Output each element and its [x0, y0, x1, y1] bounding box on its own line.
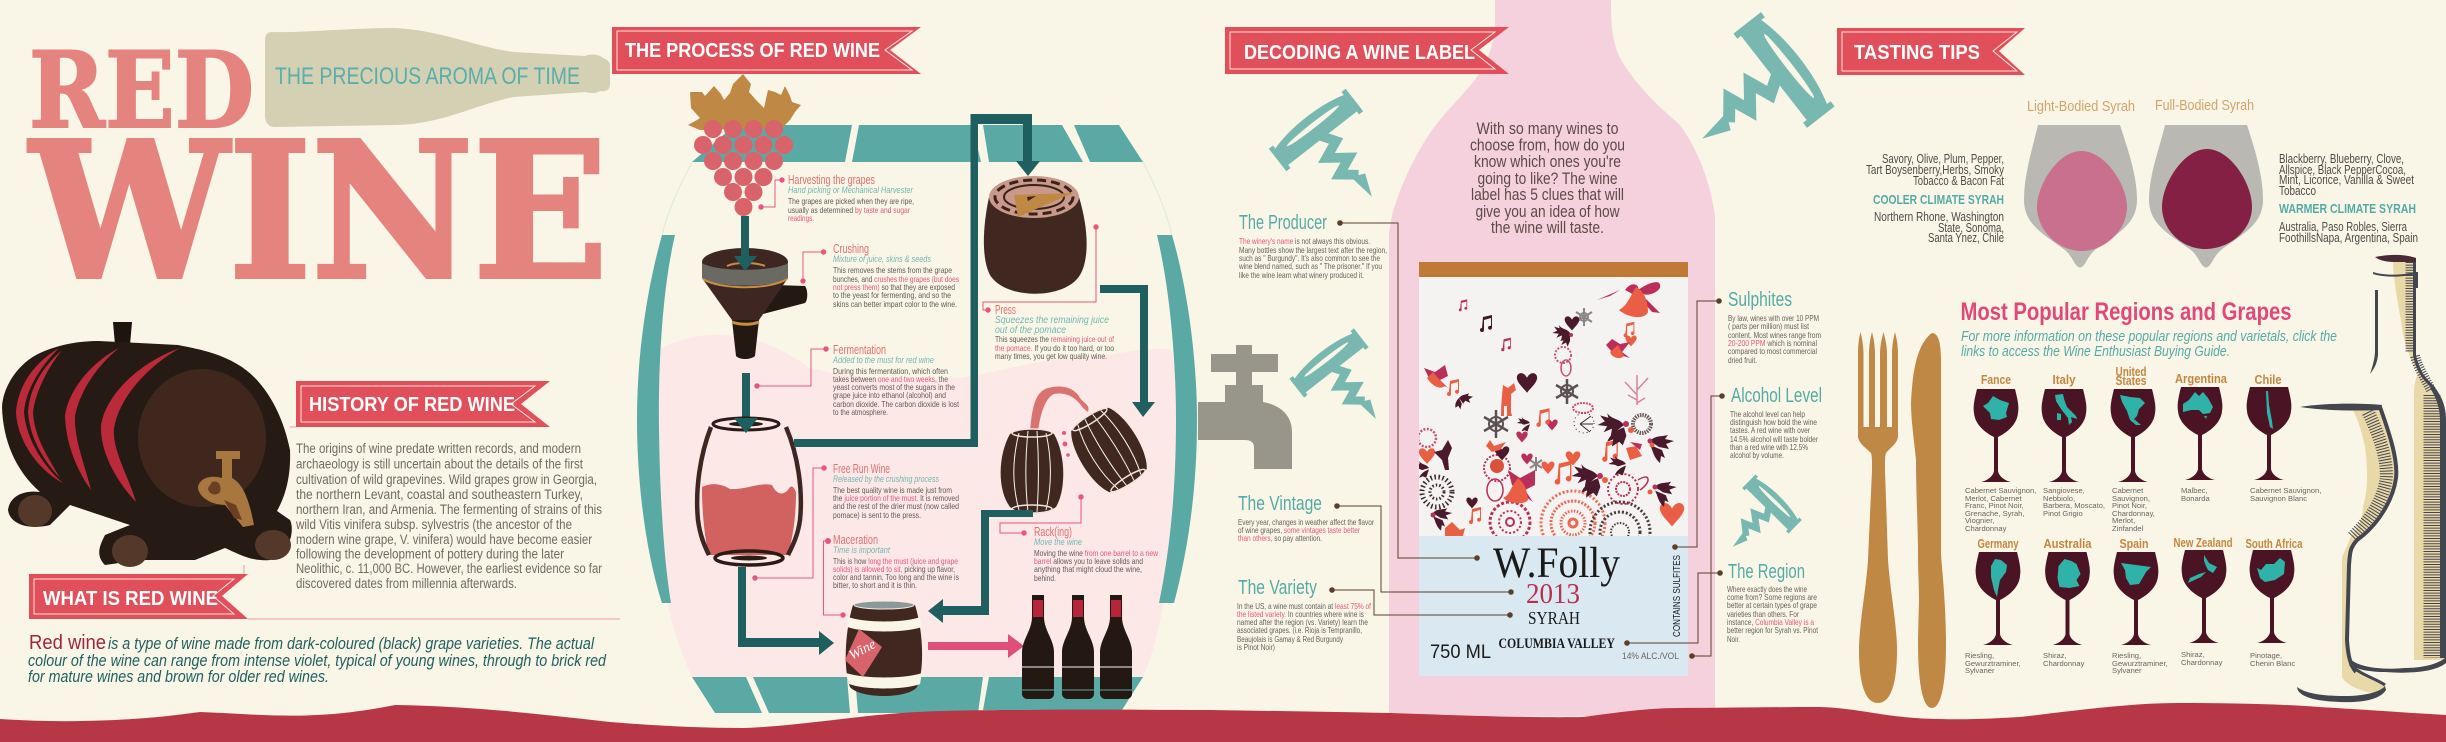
- callout: crushing: skins can better impart color to the wine.: [833, 299, 957, 309]
- callout: harvesting the grapes: Harvesting the grapes: [788, 172, 875, 187]
- callout: the region: varieties than others. For: [1727, 609, 1799, 619]
- country: Chile: Cabernet Sauvignon,: [2250, 486, 2321, 495]
- banner: what is red wine: WHAT IS RED WINE: [43, 588, 218, 610]
- callout: crushing: This removes the stems from the grape: [833, 265, 952, 275]
- callout: alcohol level: [1689, 385, 1822, 659]
- country: France: Fance: [1981, 372, 2011, 387]
- chart: light-bodied syrah glass: Light-Bodied Syrah: [2027, 98, 2135, 115]
- callout: free run wine: The best quality wine is made just from: [833, 485, 952, 495]
- country: South Africa: [2246, 536, 2303, 668]
- callout: maceration: solids) is allowed to sit, picking up flavor,: [833, 564, 955, 574]
- text block: warmer climate syrah: [2279, 152, 2418, 245]
- illustration: oak barrel with tap: [2, 322, 292, 567]
- chart: wine regions row two: [1965, 535, 2303, 675]
- icon: racking barrels pouring: [1001, 386, 1156, 513]
- callout: harvesting the grapes: [758, 172, 914, 223]
- arrow: press to racking: [1100, 285, 1155, 417]
- callout: harvesting the grapes: Hand picking or Mechanical Harvester: [788, 185, 914, 195]
- text block: history of red wine: archaeology is still uncertain about the details of the first: [296, 456, 583, 472]
- bottle with subtitle: THE PRECIOUS AROMA OF TIME: [275, 63, 580, 90]
- text block: cooler climate syrah: Santa Ynez, Chile: [1928, 231, 2004, 245]
- music notes: [1447, 322, 1634, 524]
- callout: the producer: like the wine learn what winery produced it.: [1239, 270, 1364, 280]
- text block: what is red wine: Red wine: [29, 632, 106, 654]
- callout: the region: instance, Columbia Valley is a: [1727, 617, 1814, 627]
- text block: cooler climate syrah: Tart Boysenberry,Herbs, Smoky: [1866, 163, 2005, 177]
- text block: wine label intro: the wine will taste.: [1491, 219, 1604, 237]
- callout: sulphites: Sulphites: [1728, 289, 1792, 311]
- callout: maceration: Maceration: [833, 532, 878, 547]
- label pattern: festive ornaments: [1419, 282, 1684, 536]
- panel: large process barrel: [637, 125, 1197, 713]
- callout: the region: Noir.: [1727, 634, 1740, 644]
- callout: the variety: The Variety: [1238, 577, 1317, 599]
- text block: warmer climate syrah: Tobacco: [2279, 184, 2316, 198]
- callout: crushing: to the yeast for fermenting, and so the: [833, 290, 951, 300]
- callout: alcohol level: alcohol by volume.: [1730, 450, 1784, 460]
- country: France: [1965, 372, 2036, 533]
- country: New Zealand: Chardonnay: [2181, 658, 2223, 667]
- callout: racking: [1000, 494, 1159, 583]
- arrow: barrel to press: [794, 114, 1040, 447]
- callout: the variety: is Pinot Noir): [1237, 642, 1275, 652]
- arrow: funnel to barrel: [734, 373, 758, 433]
- callout: racking: Move the wine: [1034, 537, 1082, 547]
- callout: press: many times, you get low quality wine.: [995, 351, 1107, 361]
- text block: wine label intro: label has 5 clues that will: [1471, 186, 1624, 204]
- text block: regions intro: [1961, 329, 2337, 360]
- callout: sulphites: compared to most commercial: [1728, 346, 1817, 356]
- text block: warmer climate syrah: Blackberry, Blueberry, Clove,: [2279, 152, 2404, 166]
- callout: the region: Where exactly does the wine: [1727, 584, 1807, 594]
- country: Argentina: Argentina: [2175, 371, 2228, 386]
- text block: history of red wine: northern Iran, and Armenia. The fermenting of strains of this: [296, 502, 602, 517]
- callout: fermentation: takes between one and two weeks, the: [833, 374, 948, 384]
- text block: wine label intro: know which ones you're: [1474, 153, 1621, 171]
- text block: wine label intro: choose from, how do you: [1470, 137, 1625, 155]
- callout: the region: better at certain types of grape: [1727, 600, 1817, 610]
- callout: press: [983, 224, 1115, 361]
- banner: the process of red wine: [612, 27, 921, 74]
- country: Australia: [2043, 536, 2092, 668]
- bottle with subtitle: [265, 28, 610, 127]
- callout: the region: better region for Syrah vs. Pinot: [1727, 625, 1819, 635]
- callout: harvesting the grapes: readings.: [788, 213, 814, 223]
- illustration: wine label: W.Folly: [1493, 540, 1620, 587]
- banner: decoding a wine label: [1225, 27, 1509, 74]
- callout: crushing: not press them) so that they are exposed: [833, 282, 955, 292]
- text block: warmer climate syrah: WARMER CLIMATE SYRAH: [2279, 201, 2416, 216]
- callout: the region: The Region: [1728, 561, 1805, 583]
- callout: alcohol level: distinguish how bold the wine: [1730, 417, 1817, 427]
- country: United States: United: [2116, 364, 2147, 379]
- country: United States: Cabernet: [2112, 486, 2144, 495]
- callout: the producer: [1238, 212, 1480, 561]
- heading: most popular regions and grapes: Most Popular Regions and Grapes: [1960, 298, 2292, 326]
- country: Chile: [2247, 372, 2321, 503]
- text block: history of red wine: following the development of pottery during the later: [296, 546, 564, 562]
- illustration: engraved bottle: [2350, 255, 2446, 673]
- callout: free run wine: Free Run Wine: [833, 461, 890, 476]
- country: United States: Pinot Noir,: [2112, 501, 2147, 510]
- callout: fermentation: grape juice into ethanol (alcohol) and: [833, 390, 946, 400]
- text block: wine label intro: [1470, 120, 1625, 237]
- icon: corkscrew right lower: [1708, 474, 1803, 568]
- text block: wine label intro: going to like? The wine: [1478, 170, 1618, 188]
- deer: [1501, 383, 1516, 416]
- icon: crushing funnel: [702, 248, 807, 359]
- callout: the producer: The Producer: [1239, 212, 1327, 234]
- callout: racking: anything that might cloud the wine,: [1034, 564, 1142, 574]
- callout: crushing: Mixture of juice, skins & seeds: [833, 254, 931, 264]
- country: Australia: Shiraz,: [2043, 651, 2067, 660]
- callout: sulphites: ( parts per million) must list: [1728, 321, 1810, 331]
- country: South Africa: Chenin Blanc: [2250, 659, 2295, 668]
- callout: the variety: the listed variety. In countries where wine is: [1237, 609, 1364, 619]
- text block: what is red wine: for mature wines and brown for older red wines.: [28, 668, 329, 686]
- text block: history of red wine: modern wine grape, V. vinifera) would have become easier: [296, 532, 592, 547]
- banner: the process of red wine: THE PROCESS OF RED WINE: [625, 40, 880, 62]
- callout: fermentation: Added to the must for red wine: [832, 355, 934, 365]
- text block: what is red wine: [28, 632, 607, 686]
- country: Italy: Barbera, Moscato,: [2043, 501, 2105, 510]
- country: Chile: Chile: [2254, 372, 2282, 387]
- banner: tasting tips: [1837, 28, 2025, 75]
- callout: press: out of the pomace: [995, 324, 1066, 336]
- decorative wave: bottom wine band: [0, 703, 2446, 742]
- callout: sulphites: 20-200 PPM which is nominal: [1728, 338, 1817, 348]
- banner: history of red wine: [296, 381, 550, 427]
- callout: sulphites: By law, wines with over 10 PPM: [1728, 313, 1819, 323]
- callout: fermentation: to the atmosphere.: [833, 407, 888, 417]
- text block: cooler climate syrah: COOLER CLIMATE SYRAH: [1873, 192, 2004, 207]
- icon: press barrel: [984, 176, 1087, 294]
- callout: the variety: Beaujolais is Gamay & Red Burgundy: [1237, 634, 1344, 644]
- banner: tasting tips: TASTING TIPS: [1854, 42, 1980, 64]
- arrow: grapes to funnel: [734, 216, 757, 271]
- country: France: Grenache, Syrah,: [1965, 509, 2025, 518]
- banner: what is red wine: [29, 574, 248, 619]
- text block: regions intro: For more information on these popular regions and varietals, click the: [1961, 329, 2337, 345]
- country: Germany: Riesling,: [1965, 651, 1994, 660]
- callout: crushing: bunches, and crushes the grapes (but does: [833, 274, 959, 284]
- callout: harvesting the grapes: The grapes are picked when they are ripe,: [788, 196, 914, 206]
- callout: sulphites: content. Most wines range from: [1728, 330, 1821, 340]
- callout: the vintage: Every year, changes in weather affect the flavor: [1238, 517, 1374, 527]
- country: Chile: Sauvignon Blanc: [2250, 494, 2307, 503]
- icon: tap: [1198, 345, 1292, 469]
- country: United States: States: [2116, 373, 2146, 388]
- illustration: wine label: 14% ALC./VOL: [1622, 651, 1679, 661]
- text block: history of red wine: Neolithic, c. 11,000 BC. However, the earliest evidence so far: [296, 561, 602, 576]
- text block: warmer climate syrah: Australia, Paso Robles, Sierra: [2279, 220, 2407, 234]
- callout: the region: [1624, 561, 1819, 646]
- chart: full-bodied syrah glass: Full-Bodied Syrah: [2155, 97, 2254, 114]
- country: France: Viognier,: [1965, 516, 1994, 525]
- callout: maceration: Time is important: [833, 545, 890, 555]
- callout: harvesting the grapes: usually as determined by taste and sugar: [788, 205, 910, 215]
- callout: maceration: This is how long the must (juice and grape: [833, 556, 958, 566]
- callout: the producer: wine blend named, such as " The prisoner." If you: [1238, 261, 1382, 271]
- callout: maceration: bitter, to short and it is thin.: [833, 580, 917, 590]
- callout: the variety: [1237, 577, 1513, 652]
- callout: alcohol level: The alcohol level can help: [1730, 409, 1805, 419]
- icon: final labelled wine barrel: [845, 601, 922, 696]
- callout: fermentation: [754, 342, 960, 417]
- text block: what is red wine: colour of the wine can range from intense violet, typical of young wines, through to brick red: [28, 652, 607, 670]
- country: New Zealand: New Zealand: [2174, 535, 2233, 550]
- callout: alcohol level: Alcohol Level: [1731, 385, 1822, 407]
- callout: racking: Rack(ing): [1034, 524, 1072, 539]
- icon: grape bunch with leaf: [688, 74, 801, 216]
- text block: cooler climate syrah: [1866, 152, 2005, 245]
- country: Italy: [2042, 372, 2105, 518]
- country: Spain: Spain: [2120, 536, 2149, 551]
- country: United States: Merlot,: [2112, 516, 2135, 525]
- text block: cooler climate syrah: Tobacco & Bacon Fat: [1913, 174, 2004, 188]
- callout: racking: Moving the wine from one barrel to a new: [1034, 548, 1159, 558]
- bells with bows: [1424, 282, 1660, 503]
- callout: the vintage: of wine grapes, some vintages taste better: [1238, 525, 1360, 535]
- callout: press: the pomace. If you do it too hard, or too: [995, 343, 1114, 353]
- country: New Zealand: [2174, 535, 2233, 667]
- callout: the variety: associated grapes. (i.e. Rioja is Tempranillo,: [1237, 625, 1362, 635]
- text block: history of red wine: discovered dates from millennia afterwards.: [296, 576, 517, 591]
- arrow: pink barrel to bottles: [928, 634, 1024, 658]
- mandalas: [1419, 346, 1653, 536]
- country: South Africa: Pinotage,: [2250, 651, 2282, 660]
- illustration: wine label: SYRAH: [1528, 608, 1580, 628]
- callout: the vintage: The Vintage: [1238, 493, 1322, 515]
- panel: decoding bottle background: [1389, 0, 1715, 716]
- country: United States: Chardonnay,: [2112, 509, 2155, 518]
- callout: crushing: [800, 241, 959, 309]
- country: South Africa: South Africa: [2246, 536, 2303, 551]
- text block: regions intro: links to access the Wine Enthusiast Buying Guide.: [1961, 344, 2230, 360]
- callout: the vintage: [1238, 493, 1514, 595]
- illustration: wine label: 750 ML: [1430, 642, 1491, 663]
- arrow: racking to final barrel: [928, 510, 1033, 623]
- callout: racking: barrel allows you to leave solids and: [1034, 556, 1143, 566]
- chart: wine regions row one: [1965, 364, 2321, 533]
- callout: the variety: named after the region (vs. Variety) learn the: [1237, 617, 1368, 627]
- callout: alcohol level: than a red wine with 12.5%: [1730, 442, 1808, 452]
- callout: free run wine: the juice portion of the must. It is removed: [833, 493, 959, 503]
- text block: what is red wine: is a type of wine made from dark-coloured (black) grape varieties. The actual: [108, 635, 595, 653]
- callout: press: This squeezes the remaining juice out of: [995, 334, 1115, 344]
- title: RED: RED: [29, 28, 254, 152]
- icon: knife: [1911, 333, 1946, 708]
- callout: crushing: Crushing: [833, 241, 869, 256]
- icon: corkscrew left upper: [1268, 87, 1408, 229]
- country: Germany: Germany: [1978, 536, 2019, 551]
- callout: free run wine: [752, 461, 959, 581]
- callout: fermentation: carbon dioxide. The carbon dioxide is lost: [833, 399, 960, 409]
- illustration: wine label: CONTAINS SULFITES: [1671, 555, 1683, 637]
- country: Argentina: [2175, 371, 2228, 503]
- country: Spain: Riesling,: [2112, 651, 2141, 660]
- country: France: Franc, Pinot Noir,: [1965, 501, 2024, 510]
- callout: free run wine: and the rest of the drier must (now called: [833, 501, 959, 511]
- banner: history of red wine: HISTORY OF RED WINE: [309, 394, 515, 416]
- country: Spain: Sylvaner: [2112, 666, 2142, 675]
- icon: corkscrew top right: [1663, 11, 1836, 183]
- text block: warmer climate syrah: Allspice, Black PepperCocoa,: [2279, 163, 2406, 177]
- callout: free run wine: Released by the crushing process: [833, 474, 939, 484]
- callout: fermentation: Fermentation: [833, 342, 886, 357]
- callout: racking: behind.: [1034, 573, 1056, 583]
- illustration: wine label: 2013: [1526, 578, 1580, 610]
- country: Italy: Italy: [2052, 372, 2076, 387]
- callout: press: Squeezes the remaining juice: [995, 314, 1109, 326]
- callout: maceration: [824, 532, 959, 618]
- callout: maceration: color and tannin. Too long and the wine is: [833, 572, 959, 582]
- country: Australia: Chardonnay: [2043, 659, 2085, 668]
- text block: wine label intro: give you an idea of how: [1476, 203, 1620, 221]
- illustration: engraved wine glass: [2297, 404, 2396, 702]
- text block: history of red wine: The origins of wine predate written records, and modern: [296, 441, 581, 456]
- callout: the producer: Many bottles show the largest text after the region,: [1239, 245, 1387, 255]
- callout: free run wine: pomace) is sent to the press.: [833, 510, 921, 520]
- banner: decoding a wine label: DECODING A WINE LABEL: [1244, 42, 1475, 64]
- country: United States: Sauvignon,: [2112, 494, 2150, 503]
- title: WINE: WINE: [28, 101, 608, 322]
- callout: fermentation: yeast converts most of the sugars in the: [833, 382, 955, 392]
- country: Germany: Gewurztraminer,: [1965, 659, 2021, 668]
- text block: history of red wine: the northern Levant, coastal and southeastern Turkey,: [296, 487, 583, 502]
- icon: corkscrew left lower: [1288, 327, 1406, 446]
- text block: history of red wine: [295, 441, 602, 591]
- callout: sulphites: dried fruit.: [1728, 355, 1757, 365]
- callout: the variety: In the US, a wine must contain at least 75% of: [1237, 601, 1372, 611]
- country: New Zealand: Shiraz,: [2181, 650, 2205, 659]
- callout: the region: come from? Some regions are: [1727, 592, 1817, 602]
- country: France: Chardonnay: [1965, 524, 2007, 533]
- text block: wine label intro: With so many wines to: [1476, 120, 1618, 138]
- hearts: [1466, 316, 1579, 508]
- country: Spain: Gewurztraminer,: [2112, 659, 2168, 668]
- callout: sulphites: [1672, 289, 1821, 550]
- illustration: wine label: COLUMBIA VALLEY: [1498, 636, 1615, 652]
- country: United States: [2111, 364, 2155, 533]
- callout: press: Press: [995, 302, 1016, 317]
- arrow: barrel to final barrel: [738, 567, 834, 655]
- callout: fermentation: During this fermentation, which often: [833, 366, 948, 376]
- callout: alcohol level: tastes. A red wine with over: [1730, 425, 1810, 435]
- callout: the producer: such as " Burgundy". It's also common to see the: [1239, 253, 1380, 263]
- text block: cooler climate syrah: Savory, Olive, Plum, Pepper,: [1882, 152, 2004, 166]
- country: United States: Zinfandel: [2112, 524, 2144, 533]
- country: Italy: Sangiovese,: [2043, 486, 2085, 495]
- country: Spain: [2112, 536, 2168, 675]
- country: France: Merlot, Cabernet: [1965, 494, 2022, 503]
- illustration: wine label: [1414, 262, 1688, 676]
- snowflakes: [1484, 308, 1592, 471]
- holly: [1414, 325, 1677, 531]
- callout: alcohol level: 14.5% alcohol will taste bolder: [1730, 434, 1818, 444]
- callout: the vintage: than others, so pay attention.: [1238, 533, 1322, 543]
- text block: cooler climate syrah: State, Sonoma,: [1938, 221, 2004, 235]
- chart: light-bodied syrah glass: [2024, 98, 2137, 268]
- icon: open fermentation barrel with wine: [697, 418, 801, 565]
- country: France: Cabernet Sauvignon,: [1965, 486, 2036, 495]
- country: Argentina: Malbec,: [2181, 486, 2208, 495]
- country: Italy: Nebbiolo,: [2043, 494, 2075, 503]
- icon: final labelled wine barrel: Wine: [847, 637, 879, 664]
- text block: cooler climate syrah: Northern Rhone, Washington: [1874, 210, 2004, 224]
- country: Argentina: Bonarda: [2181, 494, 2210, 503]
- country: Australia: Australia: [2044, 536, 2092, 551]
- text block: history of red wine: cultivation of wild grapevines. Wild grapes grow in Georgia,: [296, 472, 597, 487]
- icon: three wine bottles: [1022, 595, 1132, 699]
- country: Germany: Sylvaner: [1965, 666, 1995, 675]
- callout: the producer: The winery's name is not always this obvious.: [1239, 236, 1370, 246]
- country: Germany: [1965, 536, 2021, 675]
- icon: fork: [1858, 332, 1898, 703]
- chart: full-bodied syrah glass: [2149, 97, 2263, 268]
- text block: warmer climate syrah: Mint, Licorice, Vanilla & Sweet: [2279, 173, 2414, 187]
- country: Italy: Pinot Grigio: [2043, 509, 2083, 518]
- text block: history of red wine: wild Vitis vinifera subsp. sylvestris (the ancestor of the: [295, 517, 572, 532]
